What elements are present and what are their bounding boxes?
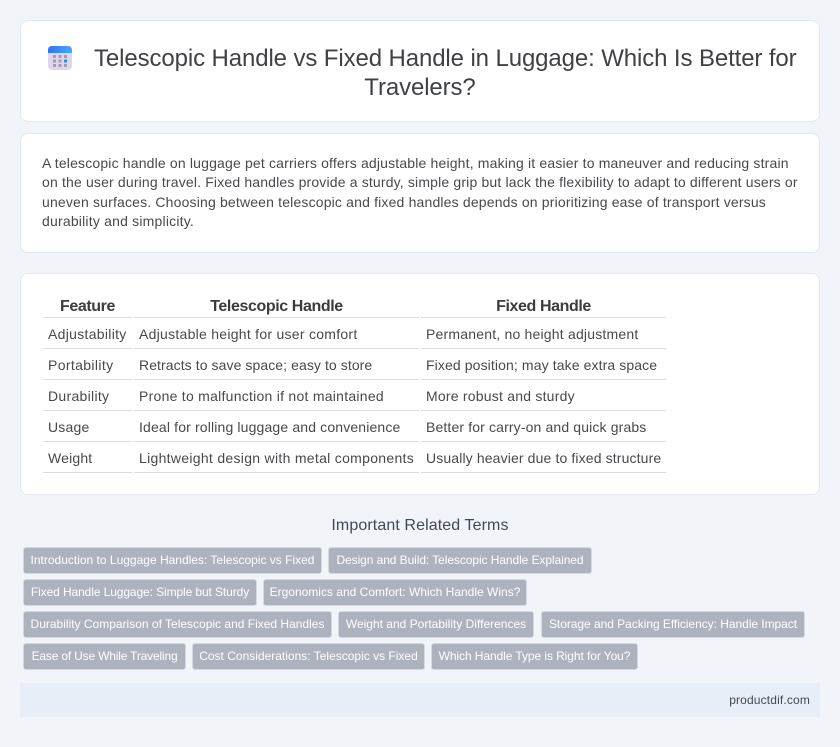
related terms heading: Important Related Terms (331, 517, 509, 534)
related terms chips (23, 547, 805, 670)
comparison table: Adjustable height for user comfort (139, 326, 358, 342)
title: Travelers? (364, 74, 476, 101)
intro paragraph: uneven surfaces. Choosing between telescopic and fixed handles depends on prioritizing ease of transport versus (42, 194, 766, 210)
related terms chips: Introduction to Luggage Handles: Telescopic vs Fixed (31, 553, 314, 567)
title (94, 45, 797, 101)
intro text panel (20, 133, 820, 253)
intro paragraph (42, 154, 798, 229)
comparison table: Portability (48, 357, 113, 373)
comparison table: Ideal for rolling luggage and convenience (139, 419, 400, 435)
intro paragraph: on the user during travel. Fixed handles provide a sturdy, simple grip but lack the flexibility to adapt to different users or (42, 174, 798, 190)
title: Telescopic Handle vs Fixed Handle in Luggage: Which Is Better for (94, 45, 797, 72)
comparison table: Weight (48, 450, 92, 466)
comparison table: Telescopic Handle (210, 298, 343, 315)
comparison table: Durability (48, 388, 109, 404)
related terms chips: Cost Considerations: Telescopic vs Fixed (199, 649, 418, 663)
related terms chips: Storage and Packing Efficiency: Handle Impact (549, 617, 797, 631)
comparison table: Lightweight design with metal components (139, 450, 414, 466)
related terms chips: Ergonomics and Comfort: Which Handle Wins? (270, 585, 520, 599)
comparison table: Fixed Handle (496, 298, 591, 315)
comparison table: Permanent, no height adjustment (426, 326, 638, 342)
footer bar (20, 683, 820, 717)
intro paragraph: durability and simplicity. (42, 213, 194, 229)
icon: calendar (48, 46, 72, 70)
title panel (20, 20, 820, 122)
footer source: productdif.com (729, 693, 810, 707)
comparison table: Prone to malfunction if not maintained (139, 388, 384, 404)
related terms chips: Design and Build: Telescopic Handle Explained (336, 553, 584, 567)
related terms chips: Weight and Portability Differences (346, 617, 526, 631)
comparison table: Usually heavier due to fixed structure (426, 450, 661, 466)
comparison table: Fixed position; may take extra space (426, 357, 657, 373)
intro paragraph: A telescopic handle on luggage pet carriers offers adjustable height, making it easier to maneuver and reducing strain (42, 154, 789, 170)
comparison table: Better for carry-on and quick grabs (426, 419, 646, 435)
comparison table: Adjustability (48, 326, 127, 342)
comparison table panel (20, 273, 820, 495)
related terms chips: Which Handle Type is Right for You? (439, 649, 630, 663)
comparison table: More robust and sturdy (426, 388, 575, 404)
comparison table: Usage (48, 419, 89, 435)
comparison table: Retracts to save space; easy to store (139, 357, 372, 373)
related terms chips: Fixed Handle Luggage: Simple but Sturdy (31, 585, 249, 599)
related terms chips: Durability Comparison of Telescopic and Fixed Handles (31, 617, 324, 631)
comparison table: Feature (60, 298, 115, 315)
comparison table (43, 298, 666, 473)
related terms chips: Ease of Use While Traveling (32, 649, 177, 663)
